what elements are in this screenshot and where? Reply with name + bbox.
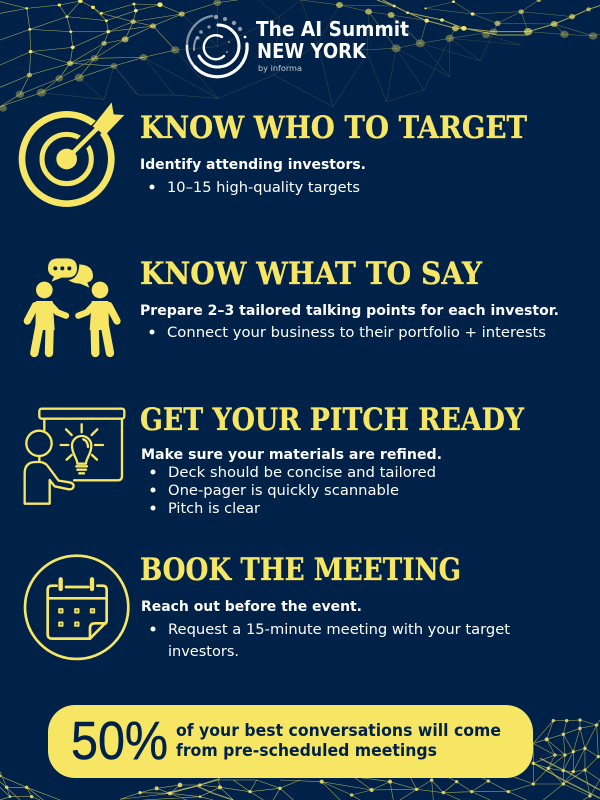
logo: The AI Summit New York by Informa	[187, 15, 409, 77]
subheading: Reach out before the event.	[141, 599, 362, 615]
speech bubbles	[48, 258, 93, 288]
network mesh: top left	[0, 0, 237, 112]
icon: calendar in circle	[25, 556, 128, 659]
bullet: 10–15 high-quality targets	[167, 180, 360, 196]
bullet list: Deck should be concise and tailored	[168, 465, 436, 481]
callout: 50% statistic	[48, 705, 533, 778]
bullet: investors.	[168, 644, 239, 660]
section: know who to target	[140, 110, 527, 196]
heading: KNOW WHAT TO SAY	[140, 256, 483, 292]
left person	[27, 282, 66, 353]
subheading: Make sure your materials are refined.	[141, 447, 442, 463]
subheading: Identify attending investors.	[140, 157, 366, 173]
right person	[78, 282, 117, 353]
section: know what to say	[140, 256, 559, 341]
icon: two people talking	[27, 258, 117, 353]
bullet: Connect your business to their portfolio + interests	[167, 325, 546, 341]
heading: KNOW WHO TO TARGET	[140, 110, 527, 146]
bullet list: One-pager is quickly scannable	[168, 483, 399, 499]
big number: 50%	[71, 711, 168, 771]
logo mark: concentric rings	[187, 15, 247, 77]
bullet: Request a 15-minute meeting with your target	[168, 622, 510, 638]
heading: GET YOUR PITCH READY	[140, 402, 525, 438]
section: book the meeting	[140, 552, 510, 660]
logo text: by informa: by informa	[258, 64, 302, 73]
bullet list: Pitch is clear	[168, 501, 260, 517]
subheading: Prepare 2–3 tailored talking points for each investor.	[140, 303, 559, 319]
bullet	[150, 622, 510, 660]
network mesh: bottom right	[280, 718, 600, 800]
icon: presenter with lightbulb board	[25, 409, 124, 504]
icon: target with arrow	[22, 102, 124, 204]
logo text: New York: NEW YORK	[257, 39, 367, 63]
logo text: The AI Summit: The AI Summit	[256, 17, 409, 41]
section: get your pitch ready	[140, 402, 525, 517]
bullet list	[150, 465, 436, 517]
callout: 50% statistic: from pre-scheduled meetings	[176, 741, 437, 761]
callout background	[48, 705, 533, 778]
heading: BOOK THE MEETING	[140, 552, 461, 588]
network mesh: bottom left and centre	[0, 772, 300, 800]
callout text: of your best conversations will come	[176, 721, 501, 741]
network mesh: top right	[217, 0, 600, 107]
